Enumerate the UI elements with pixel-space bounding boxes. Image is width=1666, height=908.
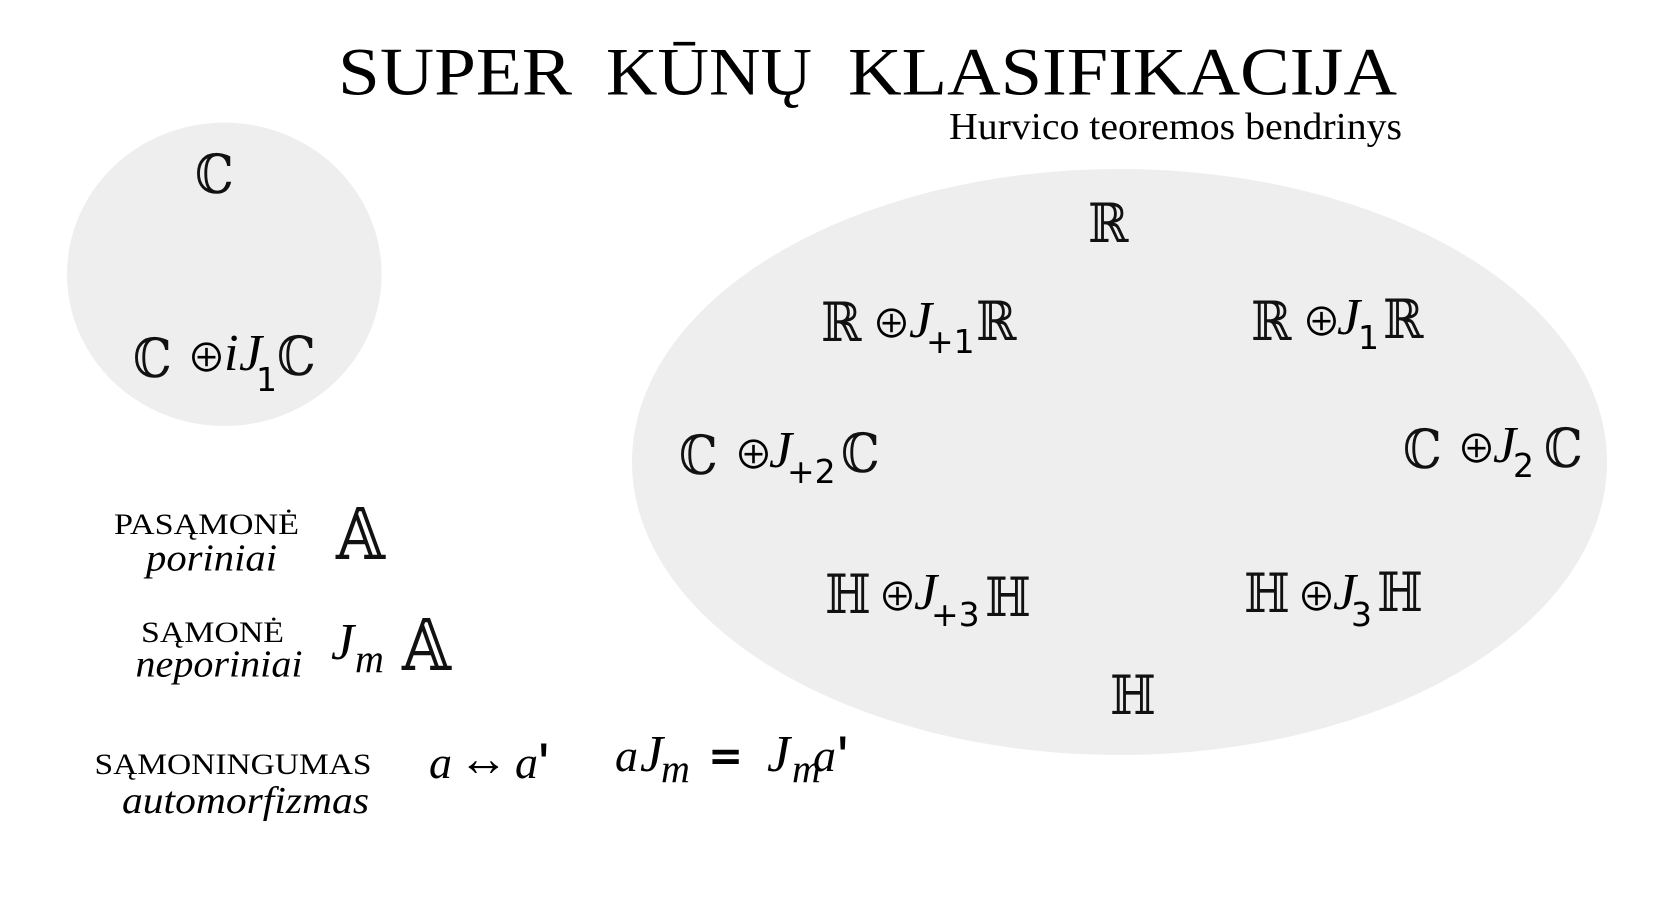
formula: aJm equals Jma prime: = xyxy=(708,731,743,780)
formula: aJm equals Jma prime: J xyxy=(767,726,793,783)
formula: C plus J2 C xyxy=(1403,417,1583,485)
formula: H plus J3 H: J xyxy=(1333,564,1359,621)
formula: a maps to a prime xyxy=(429,730,549,798)
formula: C plus iJ1 C: ℂ xyxy=(277,326,316,389)
formula: H plus J3 H xyxy=(1244,562,1423,634)
formula: C plus J2 C: ⊕ xyxy=(1457,419,1496,475)
formula: aJm equals Jma prime: m xyxy=(661,746,690,791)
formula: C plus iJ1 C: ℂ xyxy=(133,328,172,391)
formula: R plus J1 R: 1 xyxy=(1358,318,1379,357)
legend: SĄMONINGUMAS automorfizmas xyxy=(94,748,372,822)
legend: SĄMONINGUMAS automorfizmas: SĄMONINGUMAS xyxy=(94,748,372,781)
legend: SĄMONINGUMAS automorfizmas: automorfizmas xyxy=(122,780,369,822)
title: KLASIFIKACIJA xyxy=(848,34,1397,110)
formula: R plus J+1 R: ⊕ xyxy=(872,294,911,350)
formula: C plus J+2 C: ⊕ xyxy=(734,425,773,481)
formula: R plus J+1 R: J xyxy=(909,292,935,349)
formula: H: ℍ xyxy=(1110,665,1156,728)
formula: a maps to a prime: ' xyxy=(538,731,549,798)
legend: SĄMONĖ neporiniai: SĄMONĖ xyxy=(141,616,284,649)
formula: aJm equals Jma prime xyxy=(615,724,848,791)
legend: SĄMONĖ neporiniai: neporiniai xyxy=(136,644,302,686)
icon: double-struck A: 𝔸 xyxy=(335,494,386,576)
formula: C plus iJ1 C: ⊕ xyxy=(187,328,226,384)
formula: R plus J+1 R: ℝ xyxy=(976,291,1018,354)
formula: H plus J+3 H: ⊕ xyxy=(878,567,917,623)
legend: SĄMONĖ neporiniai: 𝔸 xyxy=(401,605,452,687)
formula: R plus J1 R: J xyxy=(1337,289,1363,346)
formula: a maps to a prime: a xyxy=(515,737,538,788)
formula: C plus J+2 C: J xyxy=(769,422,795,479)
subtitle: Hurvico teoremos bendrinys xyxy=(949,106,1402,148)
formula: C plus iJ1 C: i xyxy=(224,325,238,382)
title: SUPER xyxy=(338,34,573,110)
formula: R plus J1 R: ⊕ xyxy=(1302,292,1341,348)
formula: C plus iJ1 C: J xyxy=(239,325,265,382)
title: KŪNŲ xyxy=(606,34,812,110)
panel: complex fields ellipse xyxy=(67,123,382,426)
formula: C plus J+2 C xyxy=(679,422,880,491)
legend: PASĄMONĖ porinai xyxy=(114,494,386,580)
legend: SĄMONĖ neporiniai xyxy=(136,605,452,687)
formula: H plus J+3 H: ℍ xyxy=(825,564,871,627)
formula: C plus J+2 C: +2 xyxy=(787,452,836,491)
formula: aJm equals Jma prime: m xyxy=(792,746,821,791)
formula: H plus J+3 H: J xyxy=(914,564,940,621)
formula: C plus J+2 C: ℂ xyxy=(841,423,880,486)
title xyxy=(338,34,1397,110)
formula: R plus J1 R: ℝ xyxy=(1251,291,1293,354)
formula: a maps to a prime: ↔ xyxy=(458,730,508,786)
formula: C plus J2 C: ℂ xyxy=(1403,419,1442,482)
formula: aJm equals Jma prime: ' xyxy=(837,724,848,791)
formula: H plus J3 H: ℍ xyxy=(1377,562,1423,625)
formula: R: ℝ xyxy=(1088,193,1130,256)
formula: aJm equals Jma prime: a xyxy=(813,730,836,781)
formula: a maps to a prime: a xyxy=(429,737,452,788)
formula: C plus iJ1 C xyxy=(133,325,316,399)
formula: R plus J+1 R: ℝ xyxy=(821,292,863,355)
formula: C plus iJ1 C: 1 xyxy=(256,360,277,399)
formula: H plus J+3 H: ℍ xyxy=(985,567,1031,630)
formula: H plus J+3 H xyxy=(825,564,1031,634)
formula: R plus J+1 R xyxy=(821,291,1018,361)
formula: aJm equals Jma prime: a xyxy=(615,730,638,781)
formula: C: ℂ xyxy=(195,144,234,207)
formula: H plus J3 H: ℍ xyxy=(1244,563,1290,626)
formula: C plus J2 C: J xyxy=(1493,417,1519,474)
formula: R plus J1 R xyxy=(1251,289,1425,357)
formula: C plus J2 C: ℂ xyxy=(1544,418,1583,481)
formula: C plus J+2 C: ℂ xyxy=(679,425,718,488)
formula: aJm equals Jma prime: J xyxy=(640,726,666,783)
formula: H plus J3 H: 3 xyxy=(1351,595,1372,634)
legend: PASĄMONĖ porinai: PASĄMONĖ xyxy=(114,508,299,541)
formula: R plus J1 R: ℝ xyxy=(1383,289,1425,352)
formula: R plus J+1 R: +1 xyxy=(926,322,975,361)
formula: C plus J2 C: 2 xyxy=(1513,446,1534,485)
formula: H plus J+3 H: +3 xyxy=(931,595,980,634)
panel: real and quaternion fields ellipse xyxy=(632,169,1607,755)
legend: PASĄMONĖ porinai: poriniai xyxy=(143,538,277,580)
legend: SĄMONĖ neporiniai: J xyxy=(331,614,357,671)
formula: H plus J3 H: ⊕ xyxy=(1297,567,1336,623)
legend: SĄMONĖ neporiniai: m xyxy=(355,636,384,681)
